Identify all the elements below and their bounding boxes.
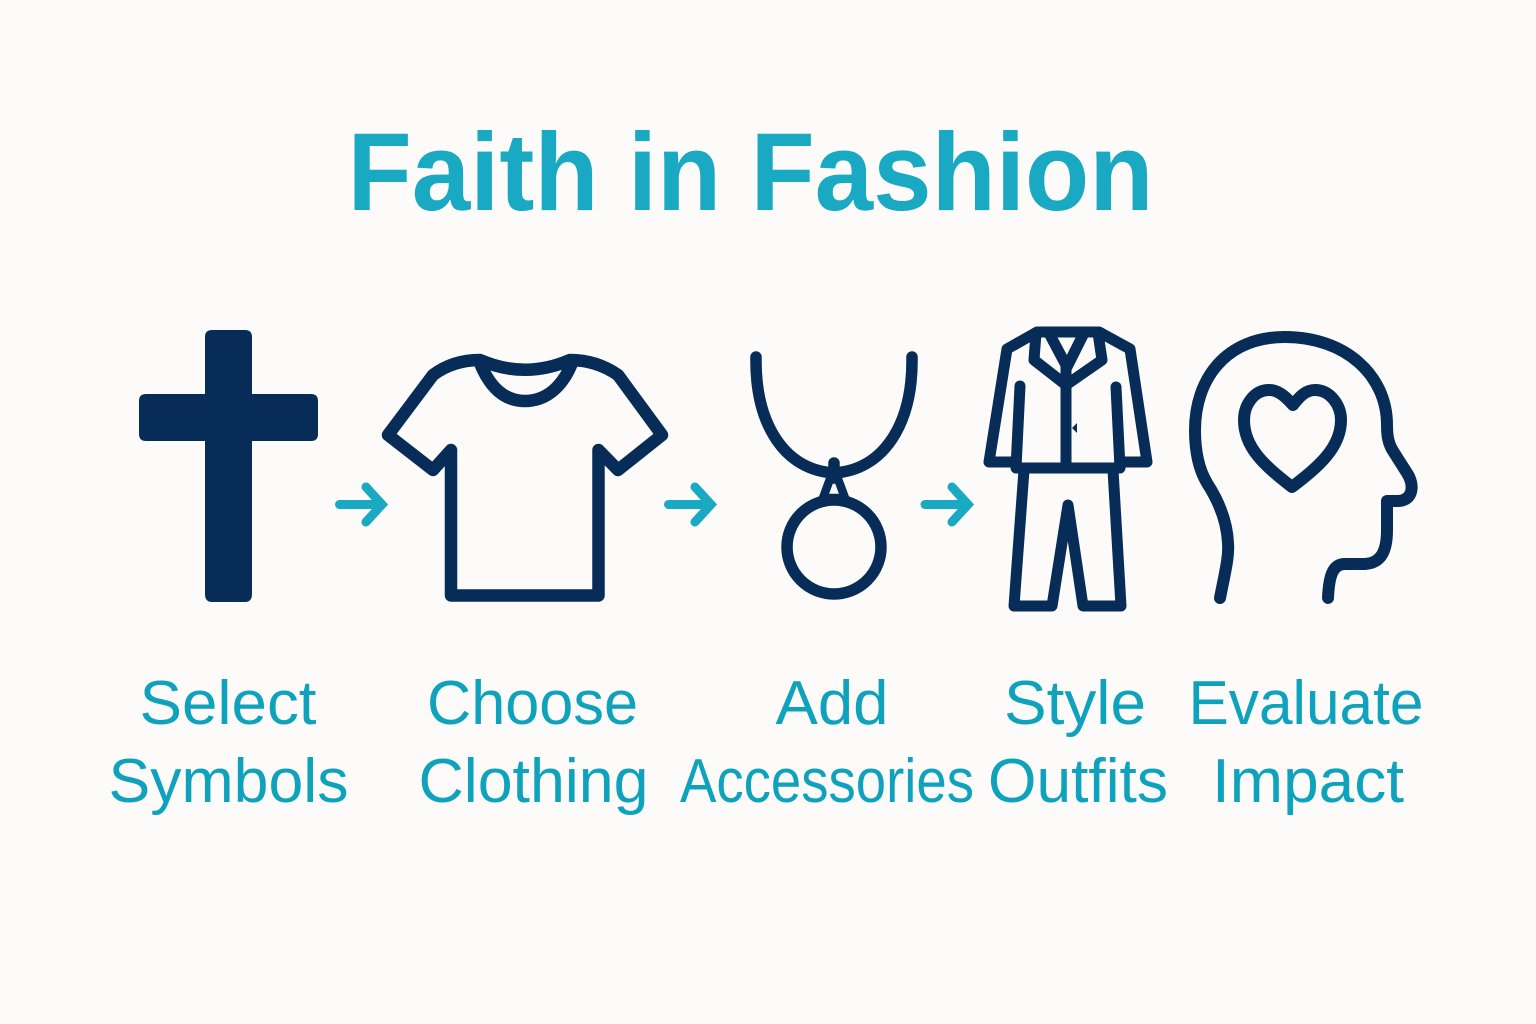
label: Evaluate Impact: Impact	[1212, 747, 1404, 816]
label: Select Symbols: Symbols	[108, 747, 348, 816]
icon: necklace	[756, 357, 912, 594]
arrow: symbols to clothing	[340, 487, 382, 522]
label: Choose Clothing: Clothing	[418, 747, 648, 816]
icon: t-shirt	[388, 360, 662, 596]
arrow: clothing to accessories	[668, 487, 711, 522]
label: Select Symbols: Select	[140, 669, 316, 738]
arrow: accessories to outfits	[925, 487, 968, 522]
label: Add Accessories: Accessories	[680, 747, 974, 816]
icon: head with heart	[1195, 337, 1412, 598]
icon: suit	[989, 332, 1147, 606]
label: Evaluate Impact: Evaluate	[1188, 669, 1424, 738]
label: Style Outfits: Outfits	[988, 747, 1168, 816]
label: Style Outfits: Style	[1004, 669, 1146, 738]
label: Add Accessories: Add	[776, 669, 888, 738]
label: Choose Clothing: Choose	[427, 669, 638, 738]
icon: cross	[139, 330, 318, 602]
title: Faith in Fashion	[348, 111, 1154, 234]
